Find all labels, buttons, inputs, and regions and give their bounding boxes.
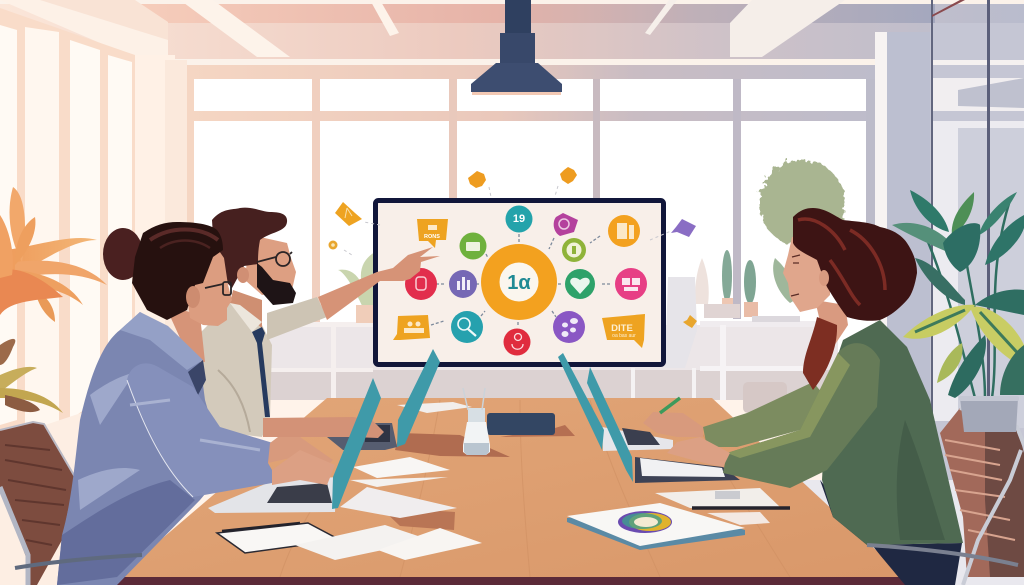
icon: orange note (335, 202, 362, 226)
pen (692, 506, 790, 510)
icon: red circle under the hand (405, 268, 437, 300)
icon: orange star top (468, 171, 486, 188)
stacked books on shelf (743, 382, 787, 413)
icon: green heart (565, 269, 595, 299)
ceiling beams (180, 0, 290, 57)
collar (120, 312, 203, 370)
laptop screen (397, 349, 440, 447)
back window panel (175, 60, 885, 400)
icon: orange badge small (328, 240, 338, 250)
neck and collar (230, 290, 262, 328)
stems (925, 200, 1010, 398)
callout: top left (417, 219, 448, 248)
yellow striped leaves (903, 305, 975, 339)
neck (815, 300, 848, 352)
icon: magenta tag (554, 213, 578, 236)
front laptop base (635, 457, 740, 483)
ceiling (0, 0, 1024, 62)
notebook (567, 505, 745, 550)
ponytail (803, 317, 837, 390)
vase and small plants (695, 258, 709, 304)
leaves (910, 190, 949, 232)
front left laptop and papers (208, 378, 482, 560)
tie (252, 327, 270, 417)
chair arm (867, 545, 1018, 565)
left wall slope (0, 0, 168, 62)
icon: orange star lower right (683, 315, 697, 328)
laptop base (208, 477, 337, 513)
back arm (703, 382, 828, 447)
shirt body (57, 312, 225, 585)
donut chart on notebook (618, 511, 672, 533)
back chair (665, 277, 697, 368)
floor left (0, 395, 200, 585)
laptop base (327, 423, 397, 450)
table front edge (117, 577, 905, 585)
face (783, 237, 830, 312)
laptop screen (332, 378, 381, 509)
face (185, 245, 232, 326)
shadows (395, 433, 510, 457)
icon: orange star right (560, 167, 577, 184)
back laptop base (602, 427, 673, 451)
right green plant (892, 190, 1024, 432)
documents on right of table (567, 488, 790, 550)
chair arm (15, 555, 142, 568)
woman seated left (15, 222, 335, 585)
monitor with infographic (376, 200, 664, 364)
back paper (397, 402, 472, 413)
icon: lime badge (562, 238, 586, 262)
sleeve (267, 297, 327, 340)
table (117, 398, 905, 585)
icon: teal badge (506, 206, 532, 232)
front laptop screen (587, 367, 633, 482)
glasses (205, 282, 231, 295)
ear (237, 267, 249, 283)
connectors (431, 234, 612, 325)
man seated, pointing (190, 208, 440, 438)
hair (212, 208, 287, 288)
left wall column (127, 55, 175, 450)
pointing arm (318, 247, 440, 320)
round bush (759, 160, 845, 246)
right laptops (558, 353, 740, 483)
plant behind man (338, 252, 375, 312)
icon: purple bars (449, 270, 477, 298)
woman seated right (643, 208, 1018, 585)
pot (960, 398, 1018, 432)
central orange ring (481, 244, 557, 320)
callout: top left: RONS (424, 234, 440, 240)
face (245, 237, 296, 295)
hair (132, 222, 223, 320)
front papers (295, 525, 430, 560)
icon: red badge (504, 328, 530, 356)
bun (103, 228, 143, 280)
neck (165, 305, 205, 362)
navy tablet box (487, 413, 555, 435)
glasses (257, 252, 292, 266)
chair: left woman (0, 422, 75, 585)
sleeve (127, 363, 273, 497)
background plants and decor (338, 160, 845, 413)
paper with photos (655, 488, 780, 508)
icon: pink grid (615, 268, 647, 300)
lower arm and hand (263, 417, 384, 438)
jacket body (822, 320, 963, 545)
lower paper (707, 512, 770, 525)
inner dark top and trousers (820, 480, 962, 585)
chair: right woman (940, 408, 1024, 585)
beard (257, 263, 296, 305)
callout: bottom right: DITE (611, 323, 633, 334)
back left laptop and paper (327, 349, 472, 450)
paper stack (350, 477, 448, 487)
callout: bottom right (602, 314, 645, 348)
tabletop (117, 398, 905, 577)
left tall windows (0, 8, 135, 470)
shirt (190, 303, 272, 437)
left orange plant (0, 187, 107, 413)
icon: green briefcase (460, 232, 486, 260)
ceiling darker band (135, 4, 935, 23)
front sleeve (723, 343, 880, 488)
icon: purple note (671, 219, 696, 237)
callout: bottom left (393, 315, 430, 340)
back laptop screen (558, 353, 604, 450)
monitor frame (376, 200, 664, 364)
floating icons around monitor (328, 167, 697, 328)
icon: orange documents (608, 215, 640, 247)
ceiling lamp (471, 0, 562, 95)
clipboard (217, 523, 340, 553)
central orange ring: 1α (507, 272, 531, 294)
callout: bottom right: oa bas aur (612, 333, 636, 339)
icon: purple dots (553, 311, 585, 343)
ear (186, 286, 200, 308)
icon: teal badge: 19 (513, 213, 525, 225)
eye and mouth (791, 255, 800, 296)
desk items (463, 388, 555, 455)
ear (819, 270, 829, 286)
dashed connectors (344, 186, 671, 255)
lower hand (667, 437, 730, 467)
icon: teal magnifier (451, 311, 483, 343)
pen hand (643, 412, 703, 437)
grey column and glass partition (875, 32, 887, 412)
hair (793, 208, 917, 321)
floor right (780, 480, 1024, 585)
pen (660, 398, 680, 413)
lower wall and shelving (268, 325, 838, 400)
hands (268, 437, 333, 468)
glass jar (463, 388, 490, 455)
